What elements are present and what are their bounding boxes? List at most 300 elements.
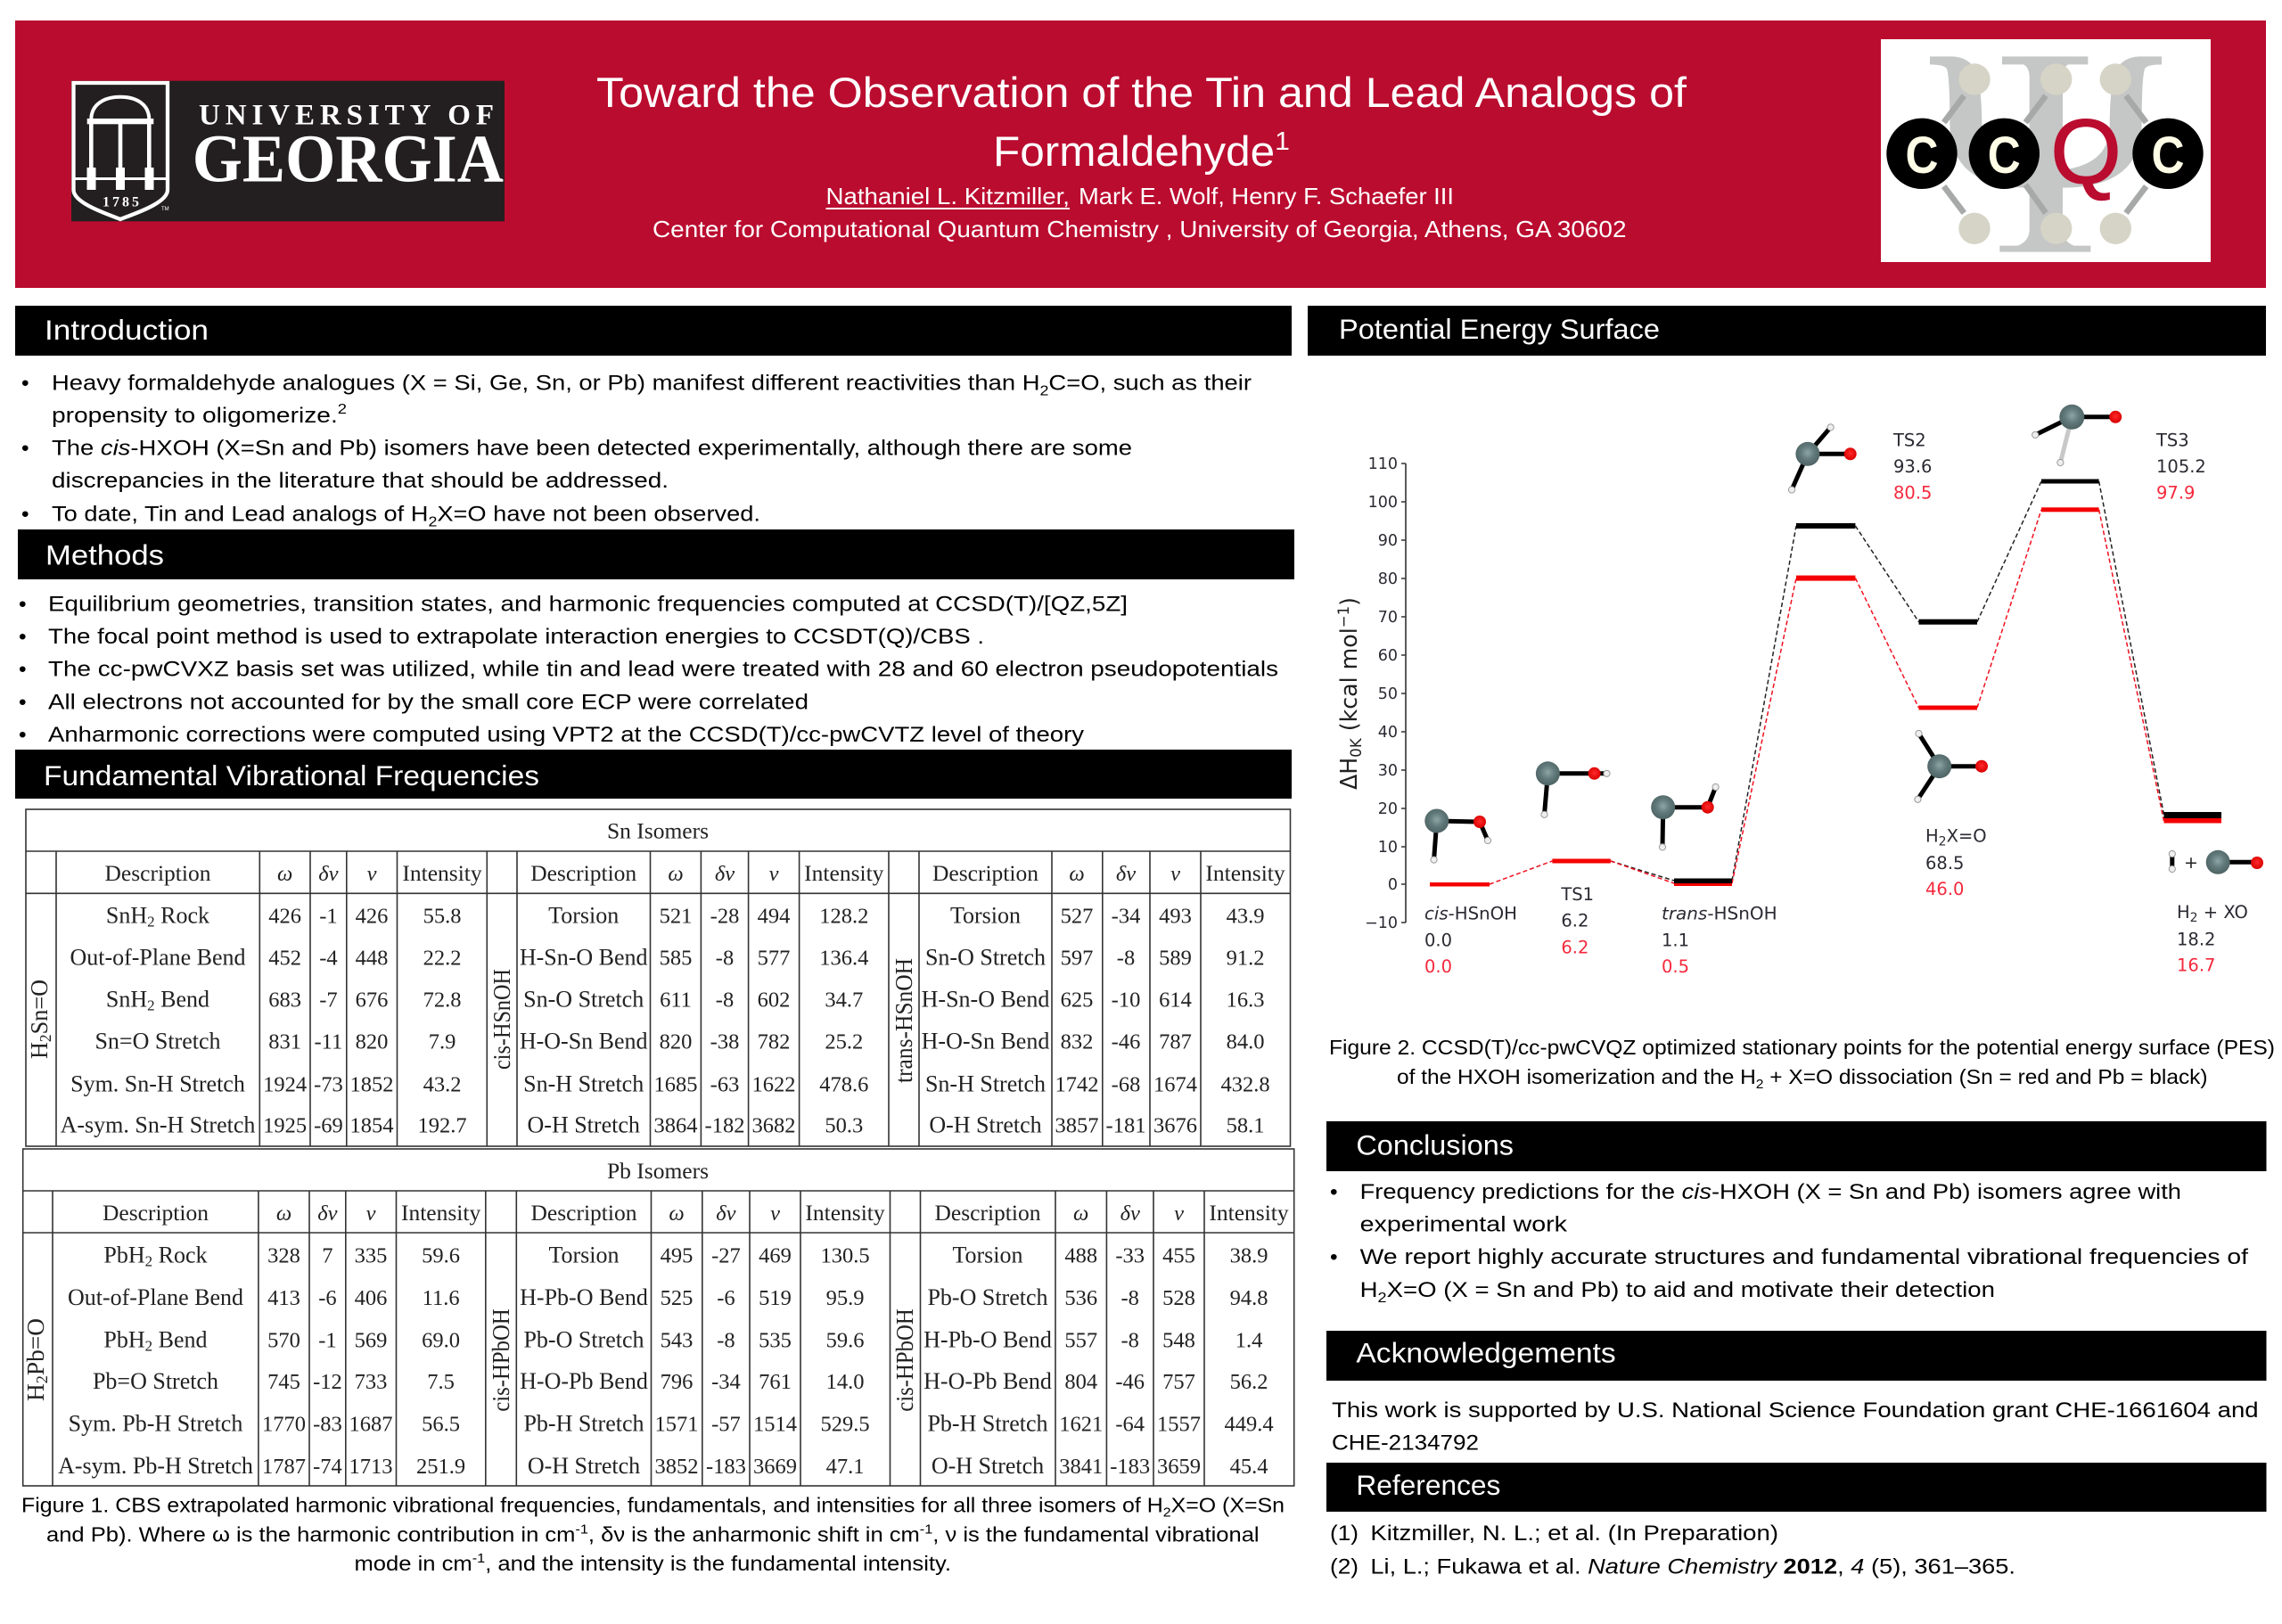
table rows: Pb data: -57 — [711, 1413, 741, 1437]
table rows: Sn data: -63 — [710, 1072, 739, 1096]
text block: Conclusions bullets: 2 — [1378, 1291, 1387, 1306]
table header row: ν — [1174, 1202, 1184, 1226]
caption: Figure 2: of the HXOH isomerization and the H — [1397, 1065, 1742, 1088]
table rows: Pb data: 557 — [1064, 1329, 1097, 1353]
text block: References: (2) — [1330, 1554, 1359, 1579]
text block: Conclusions bullets: H — [1360, 1278, 1375, 1302]
label: cis-HSnOH: cis-HSnOH — [1424, 904, 1517, 924]
label: H2X=O: X=O — [1947, 825, 1987, 847]
table rows: Pb data: 47.1 — [826, 1455, 864, 1479]
caption: Figure 1: , δν is the anharmonic shift in cm — [588, 1522, 920, 1546]
table header row: ν — [367, 862, 377, 886]
header banner — [15, 21, 2266, 288]
table rows: Pb data: 455 — [1162, 1244, 1195, 1267]
table rows: Sn data: 683 — [268, 988, 301, 1012]
y axis: 0K — [1348, 738, 1366, 758]
table rows: Sn data: O-H Stretch — [528, 1112, 640, 1138]
table rows: Sn data: 43.2 — [423, 1072, 461, 1096]
table header row: Description — [103, 1200, 209, 1226]
caption: Figure 1: X=O (X=Sn — [1171, 1494, 1285, 1517]
table rows: Sn data: 1742 — [1055, 1072, 1098, 1096]
table title: Pb Isomers: Pb Isomers — [607, 1158, 709, 1184]
table rows: Sn data: -46 — [1112, 1030, 1140, 1054]
text block: Methods bullets: Equilibrium geometries, transition states, and harmonic frequencies computed at CCSD(T)/[QZ,5Z] — [48, 593, 1128, 617]
table rows: Sn data: Sn-O Stretch — [925, 945, 1046, 971]
molecule: TS1 — [1536, 761, 1610, 817]
table rows: Pb data: 745 — [267, 1370, 300, 1394]
table rows: Pb data: PbH — [103, 1327, 208, 1355]
caption: Figure 1: 2 — [1163, 1505, 1171, 1521]
table rows: Pb data: 335 — [355, 1244, 387, 1267]
table rows: Pb data: Pb-O Stretch — [523, 1327, 644, 1353]
table rows: Sn data: 3857 — [1055, 1114, 1098, 1138]
table header row: ω — [668, 862, 684, 886]
table rows: Sn data: 1924 — [263, 1072, 307, 1096]
table rows: Pb data: 1514 — [753, 1413, 797, 1437]
label: H2X=O — [1925, 825, 1987, 899]
heading: Fundamental Vibrational Frequencies: Fundamental Vibrational Frequencies — [44, 759, 539, 791]
table rows: Sn data: -10 — [1112, 988, 1140, 1012]
authors: Nathaniel L. Kitzmiller, — [825, 183, 1070, 209]
label: TS2: 93.6 — [1893, 456, 1932, 477]
table row labels: Sn isomers: cis-HSnOH — [488, 969, 515, 1070]
table header row: Intensity — [1205, 860, 1285, 886]
table header row: ω — [277, 862, 292, 886]
table header row: Intensity — [1209, 1200, 1289, 1226]
table rows: Sn data: 589 — [1159, 947, 1192, 971]
table rows: Sn data: 3682 — [752, 1114, 795, 1138]
text block: Acknowledgements: This work is supported by U.S. National Science Foundation grant CHE-1661604 and — [1332, 1398, 2259, 1423]
y axis: 10 — [1378, 839, 1398, 857]
table rows: Pb data: 528 — [1162, 1286, 1195, 1310]
table rows: Pb data: 14.0 — [826, 1370, 864, 1394]
table rows: Pb data: Torsion — [548, 1243, 620, 1267]
table header row: δν — [1120, 1202, 1140, 1226]
table rows: Sn data: 494 — [758, 905, 790, 929]
molecule: cis-HSnOH — [1424, 809, 1491, 863]
table rows: Pb data: 95.9 — [826, 1286, 864, 1310]
label: H2 + XO: 16.7 — [2177, 956, 2215, 976]
table rows: Sn data: -181 — [1106, 1114, 1145, 1138]
panel: References — [1326, 1463, 2266, 1579]
table rows: Sn data: 55.8 — [423, 905, 461, 929]
text block: Methods bullets: • — [19, 690, 27, 714]
table rows: Sn data: -1 — [319, 905, 338, 929]
y axis: 20 — [1378, 800, 1398, 818]
table rows: Pb data: 7.5 — [427, 1370, 455, 1394]
energy levels: Sn — [1430, 507, 2221, 886]
table row labels: Pb isomers: cis-HPbOH — [891, 1308, 918, 1412]
table rows: Sn data: 1622 — [752, 1072, 795, 1096]
heading: Introduction — [15, 306, 1292, 356]
table rows: Pb data: 130.5 — [820, 1244, 870, 1267]
table header row: ν — [1170, 862, 1180, 886]
table row labels: Sn isomers — [26, 958, 917, 1083]
table rows: Pb data: 796 — [661, 1370, 693, 1394]
table rows: Sn data: 832 — [1061, 1030, 1093, 1054]
table rows: Pb data: Pb-H Stretch — [927, 1411, 1048, 1437]
title — [596, 70, 1687, 176]
table rows: Pb data: 1.4 — [1235, 1329, 1262, 1353]
label: TS1: TS1 — [1560, 884, 1594, 905]
text block: Methods bullets: • — [19, 625, 27, 649]
text block: Methods bullets: The focal point method is used to extrapolate interaction energies to CCSDT(Q)/CBS . — [48, 625, 984, 649]
heading: Conclusions — [1326, 1121, 2266, 1171]
label: H2X=O: 68.5 — [1925, 853, 1964, 874]
table row labels: Pb isomers: cis-HPbOH — [488, 1308, 514, 1412]
table rows: Sn data: 1854 — [349, 1114, 394, 1138]
panel: Fundamental Vibrational Frequencies — [15, 750, 1294, 1575]
table header row: ω — [1073, 1202, 1088, 1226]
table row labels: Sn isomers: Sn=O — [26, 980, 53, 1034]
label: TS3 — [2155, 430, 2206, 504]
table rows: Sn data: Torsion — [548, 903, 619, 929]
table rows: Sn data: SnH — [106, 903, 209, 931]
table rows: Sn data: -8 — [716, 988, 734, 1012]
table row labels: Pb isomers: H — [22, 1383, 49, 1401]
text block: Conclusions bullets: We report highly accurate structures and fundamental vibrational frequencies of — [1360, 1245, 2248, 1269]
table row labels: Sn isomers: 2 — [37, 1034, 54, 1042]
table: Sn isomers — [26, 809, 1291, 1146]
label: H2 + XO — [2177, 902, 2248, 976]
table rows: Pb data: H-Pb-O Bend — [923, 1327, 1052, 1353]
table rows: Pb data: 7 — [322, 1244, 333, 1267]
table rows: Sn data: 602 — [758, 988, 790, 1012]
panel: Conclusions — [1326, 1121, 2266, 1306]
table rows: Sn data: 25.2 — [825, 1030, 863, 1054]
table rows: Sn data: 84.0 — [1227, 1030, 1264, 1054]
heading: Acknowledgements: Acknowledgements — [1356, 1337, 1616, 1369]
table rows: Sn data: 50.3 — [825, 1114, 863, 1138]
y axis: 0 — [1388, 876, 1398, 894]
chart: potential energy diagram — [1335, 405, 2263, 977]
table rows: Sn data: -73 — [314, 1072, 343, 1096]
table rows: Sn data: Sn=O Stretch — [94, 1029, 221, 1054]
heading: Acknowledgements — [1326, 1331, 2266, 1381]
table rows: Sn data: H-O-Sn Bend — [922, 1029, 1049, 1054]
table rows: Sn data: 614 — [1159, 988, 1192, 1012]
table rows: Pb data: 2 — [145, 1253, 152, 1269]
table header row: Description — [932, 860, 1038, 886]
label: TS2: TS2 — [1892, 430, 1926, 450]
y axis: 70 — [1378, 609, 1398, 627]
table header row: ω — [1069, 862, 1085, 886]
table header row: Intensity — [804, 860, 884, 886]
table rows: Pb data: Rock — [152, 1243, 208, 1267]
table header row: δν — [716, 1202, 736, 1226]
table rows: Pb data: 2 — [145, 1338, 152, 1355]
text block: Introduction bullets: discrepancies in the literature that should be addressed. — [52, 469, 669, 493]
caption: Figure 1 — [21, 1494, 1285, 1575]
table rows: Sn data: 1685 — [654, 1072, 697, 1096]
table rows: Pb data: -83 — [313, 1413, 342, 1437]
table rows: Sn data: 1674 — [1153, 1072, 1197, 1096]
energy levels: Pb — [1674, 480, 2221, 883]
table rows: Sn data: 34.7 — [825, 988, 863, 1012]
y axis: 60 — [1378, 647, 1398, 665]
table rows: Pb data: 3669 — [753, 1455, 797, 1479]
caption: Figure 1: -1 — [920, 1521, 932, 1537]
table rows: Pb data: 1713 — [349, 1455, 392, 1479]
table rows: Pb data: H-Pb-O Bend — [520, 1284, 648, 1310]
table rows: Pb data: -74 — [313, 1455, 342, 1479]
table rows: Sn data: 831 — [268, 1030, 301, 1054]
table rows: Pb data: 733 — [355, 1370, 387, 1394]
table rows: Pb data: -8 — [717, 1329, 735, 1353]
label: TS2: 80.5 — [1893, 483, 1932, 504]
table: Pb isomers — [22, 1149, 1294, 1486]
label: trans-HSnOH: 0.5 — [1662, 956, 1689, 977]
table rows: Sn data: 432.8 — [1220, 1072, 1270, 1096]
table row labels: Pb isomers — [22, 1308, 918, 1412]
table rows: Pb data: Pb=O Stretch — [93, 1368, 218, 1394]
table rows: Pb data — [58, 1243, 1274, 1479]
table rows: Sn data: 611 — [660, 988, 692, 1012]
table rows: Pb data: -8 — [1120, 1286, 1139, 1310]
table rows: Sn data — [61, 903, 1270, 1138]
caption: Figure 1: mode in cm — [355, 1552, 463, 1575]
table rows: Sn data: Rock — [155, 903, 209, 929]
y axis: ΔH — [1336, 757, 1363, 790]
title: Toward the Observation of the Tin and Lead Analogs of — [596, 70, 1687, 117]
table rows: Pb data: 1571 — [654, 1413, 699, 1437]
table rows: Sn data: 136.4 — [819, 947, 868, 971]
table rows: Sn data: 2 — [147, 914, 155, 931]
text block: References: (1) — [1330, 1521, 1359, 1546]
table rows: Pb data: 449.4 — [1224, 1413, 1274, 1437]
label: trans-HSnOH: trans-HSnOH — [1662, 904, 1777, 924]
text block: Introduction bullets: To date, Tin and Lead analogs of H — [52, 502, 390, 526]
table rows: Pb data: Sym. Pb-H Stretch — [69, 1411, 242, 1437]
table rows: Pb data: Out-of-Plane Bend — [68, 1284, 243, 1310]
table rows: Pb data: Bend — [152, 1327, 208, 1353]
table rows: Pb data: 495 — [661, 1244, 693, 1267]
table rows: Pb data: 525 — [661, 1286, 693, 1310]
table rows: Pb data: -6 — [717, 1286, 735, 1310]
table rows: Sn data: 820 — [660, 1030, 692, 1054]
wordmark: GEORGIA — [193, 121, 504, 196]
heading: Introduction: Introduction — [45, 314, 209, 346]
table rows: Pb data: 529.5 — [820, 1413, 870, 1437]
heading: References: References — [1356, 1469, 1500, 1501]
table header row: Description — [531, 1200, 637, 1226]
table rows: Sn data: H-Sn-O Bend — [922, 986, 1049, 1012]
table rows: Pb data: 1770 — [262, 1413, 306, 1437]
table rows: Pb data: 251.9 — [416, 1455, 465, 1479]
table rows: Pb data: -27 — [711, 1244, 741, 1267]
molecule: TS2 — [1788, 424, 1857, 493]
table rows: Pb data: 328 — [267, 1244, 300, 1267]
table rows: Sn data: -4 — [319, 947, 338, 971]
text block: Conclusions bullets: • — [1330, 1180, 1338, 1204]
table rows: Sn data: -8 — [1117, 947, 1135, 971]
caption: Figure 2: Figure 2. CCSD(T)/cc-pwCVQZ optimized stationary points for the potential energy surface (PES) — [1329, 1036, 2275, 1059]
table rows: Pb data: 11.6 — [423, 1286, 460, 1310]
text block: Introduction bullets: The cis-HXOH (X=Sn and Pb) isomers have been detected experimentally, although there are some — [52, 437, 1132, 461]
y axis: 30 — [1378, 762, 1398, 780]
affiliation: Center for Computational Quantum Chemistry , University of Georgia, Athens, GA 30602 — [653, 216, 1626, 242]
table rows: Sn data: Bend — [155, 986, 209, 1012]
connector lines: Sn — [1490, 510, 2164, 884]
table rows: Sn data: -68 — [1112, 1072, 1140, 1096]
table rows: Pb data: 535 — [759, 1329, 792, 1353]
text block: Introduction bullets: Heavy formaldehyde analogues (X = Si, Ge, Sn, or Pb) manifest different reactivities than H — [52, 371, 936, 396]
table rows: Sn data: 452 — [268, 947, 301, 971]
table rows: Pb data: 536 — [1064, 1286, 1097, 1310]
table rows: Pb data: 3852 — [654, 1455, 699, 1479]
text block: Introduction bullets: 2 — [338, 402, 347, 417]
text block: References — [1330, 1521, 2015, 1579]
table rows: Sn data: 597 — [1061, 947, 1093, 971]
table header row: δν — [317, 1202, 338, 1226]
label: H2X=O: 2 — [1939, 834, 1947, 849]
table row labels: Sn isomers: H — [26, 1041, 53, 1059]
table rows: Pb data: 59.6 — [826, 1329, 864, 1353]
table rows: Pb data: -6 — [318, 1286, 337, 1310]
table rows: Pb data: 519 — [759, 1286, 792, 1310]
table rows: Pb data: Torsion — [952, 1243, 1023, 1267]
table rows: Pb data: 3841 — [1059, 1455, 1103, 1479]
y axis: 50 — [1378, 685, 1398, 703]
label: H2X=O: H — [1925, 825, 1939, 847]
table rows: Pb data: 1687 — [349, 1413, 392, 1437]
table rows: Sn data: 91.2 — [1227, 947, 1264, 971]
icon: CCQC letters: Q — [2050, 101, 2122, 202]
table header row: Description — [530, 860, 636, 886]
table rows: Pb data: -64 — [1115, 1413, 1145, 1437]
table rows: Sn data: Out-of-Plane Bend — [70, 945, 246, 971]
table rows: Sn data: Sn-H Stretch — [523, 1070, 644, 1096]
caption: Figure 1: -1 — [472, 1551, 485, 1566]
text block: Conclusions bullets: • — [1330, 1245, 1338, 1269]
table rows: Sn data: -7 — [319, 988, 338, 1012]
table rows: Sn data: 782 — [758, 1030, 790, 1054]
table header row: ν — [366, 1202, 376, 1226]
table rows: Pb data: 1787 — [262, 1455, 306, 1479]
caption: Figure 2 — [1329, 1036, 2275, 1092]
heading: Methods: Methods — [45, 539, 164, 571]
table header row: Description — [935, 1200, 1041, 1226]
text block: Introduction bullets: X=O have not been observed. — [437, 502, 760, 526]
icon: gray psi — [1930, 56, 2162, 252]
text block: Conclusions bullets — [1330, 1180, 2248, 1306]
table rows: Sn data: -28 — [710, 905, 739, 929]
text block: Introduction bullets: C=O, such as their — [1048, 371, 1252, 396]
table rows: Pb data: 59.6 — [422, 1244, 460, 1267]
text block: Methods bullets: • — [19, 723, 27, 747]
table title: Sn Isomers: Sn Isomers — [607, 818, 709, 844]
label: H2 + XO: 18.2 — [2177, 930, 2215, 950]
table rows: Sn data: Sn-H Stretch — [925, 1070, 1046, 1096]
table header row: δν — [318, 862, 339, 886]
table rows: Sn data: 577 — [758, 947, 790, 971]
table rows: Sn data: -11 — [315, 1030, 342, 1054]
icon: CCQC letters: C — [2152, 127, 2184, 185]
label: TS3: 97.9 — [2156, 483, 2195, 504]
molecule: trans-HSnOH — [1651, 783, 1719, 850]
text block: Introduction bullets: • — [21, 502, 29, 526]
y axis: 110 — [1368, 455, 1398, 473]
table rows: Pb data: -33 — [1115, 1244, 1145, 1267]
icon: bonds — [1944, 95, 2147, 213]
wordmark: UNIVERSITY OF — [199, 99, 494, 131]
heading: References — [1326, 1463, 2266, 1512]
label: TS3: TS3 — [2155, 430, 2189, 450]
table rows: Pb data: O-H Stretch — [528, 1453, 640, 1479]
table rows: Sn data: O-H Stretch — [929, 1112, 1042, 1138]
table rows: Sn data: 22.2 — [423, 947, 461, 971]
y axis: −10 — [1365, 915, 1398, 932]
table rows: Sn data: 72.8 — [423, 988, 461, 1012]
table rows: Sn data: 2 — [147, 997, 155, 1013]
molecule: H2 + XO — [2169, 850, 2263, 874]
panel: Potential Energy Surface — [1308, 306, 2275, 1092]
table rows: Sn data: 448 — [356, 947, 388, 971]
table header row: Intensity — [402, 860, 482, 886]
table rows: Sn data: 426 — [268, 905, 301, 929]
table rows: Sn data: Sym. Sn-H Stretch — [70, 1070, 245, 1096]
table rows: Pb data: 56.5 — [422, 1413, 460, 1437]
text block: Conclusions bullets: X=O (X = Sn and Pb) to aid and motivate their detection — [1387, 1278, 1995, 1302]
text block: Introduction bullets: 2 — [1039, 383, 1049, 399]
text block: Methods bullets: • — [19, 658, 27, 682]
label: cis-HSnOH: 0.0 — [1424, 931, 1452, 950]
text block: References: Li, L.; Fukawa et al. Nature Chemistry 2012, 4 (5), 361–365. — [1370, 1554, 2015, 1579]
heading: Potential Energy Surface: Potential Energy Surface — [1339, 313, 1660, 345]
title: Formaldehyde — [993, 128, 1264, 176]
text block: Acknowledgements — [1332, 1398, 2259, 1455]
table rows: Pb data: H-O-Pb Bend — [520, 1368, 648, 1394]
label: TS1: 6.2 — [1561, 938, 1588, 957]
molecule: TS3 — [2032, 405, 2122, 466]
table rows: Pb data: 3659 — [1157, 1455, 1201, 1479]
icon: CCQC letters: C — [1906, 127, 1938, 185]
table rows: Sn data: 192.7 — [417, 1114, 467, 1138]
heading: Methods — [18, 529, 1294, 579]
table header row: Intensity — [401, 1200, 480, 1226]
heading: Fundamental Vibrational Frequencies — [15, 750, 1292, 799]
table rows: Sn data: 521 — [660, 905, 692, 929]
table rows: Sn data: -34 — [1112, 905, 1140, 929]
caption: Figure 2: + X=O dissociation (Sn = red and Pb = black) — [1763, 1065, 2208, 1088]
table header row: ν — [770, 1202, 780, 1226]
table rows: Pb data: -8 — [1120, 1329, 1139, 1353]
label: H2 + XO: 2 — [2190, 911, 2198, 925]
caption: Figure 1: and Pb). Where ω is the harmonic contribution in cm — [46, 1522, 533, 1546]
table rows: Sn data: 3676 — [1153, 1114, 1197, 1138]
table rows: Pb data: O-H Stretch — [932, 1453, 1044, 1479]
label: H2 + XO: + XO — [2198, 902, 2248, 923]
caption: Figure 2: 2 — [1756, 1077, 1763, 1092]
table rows: Pb data: 94.8 — [1230, 1286, 1268, 1310]
table rows: Pb data: 413 — [267, 1286, 300, 1310]
table rows: Pb data: 570 — [267, 1329, 300, 1353]
table rows: Pb data: PbH — [103, 1243, 208, 1269]
table header row: δν — [715, 862, 735, 886]
table rows: Pb data: -183 — [1110, 1455, 1150, 1479]
heading: Potential Energy Surface — [1308, 306, 2266, 356]
text block: Introduction bullets: 2 — [428, 514, 437, 529]
caption: Figure 1: -1 — [575, 1521, 588, 1537]
table row labels: Pb isomers: 2 — [33, 1375, 51, 1383]
text block: References: Kitzmiller, N. L.; et al. (In Preparation) — [1370, 1521, 1778, 1546]
table rows: Pb data: Pb-H Stretch — [523, 1411, 644, 1437]
table rows: Pb data: 761 — [759, 1370, 792, 1394]
title: 1 — [1275, 127, 1290, 156]
authors: Mark E. Wolf, Henry F. Schaefer III — [1079, 183, 1454, 209]
table rows: Sn data: Torsion — [950, 903, 1021, 929]
icon: CCQC letters — [1886, 101, 2204, 202]
